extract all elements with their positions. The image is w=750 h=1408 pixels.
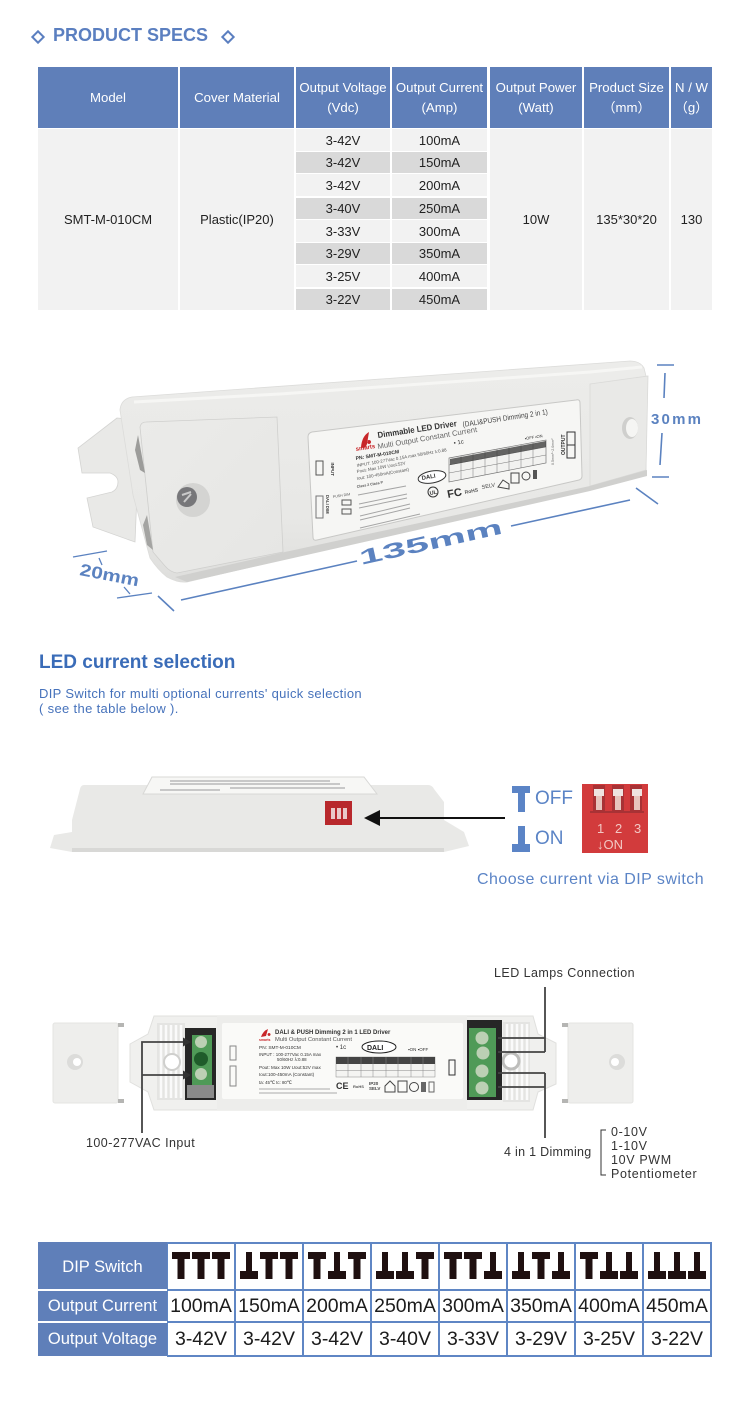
table body: SMT-M-010CM xyxy=(64,212,152,227)
current row: 450mA xyxy=(646,1294,708,1316)
screw xyxy=(176,483,210,517)
wiring diagram photo xyxy=(52,1016,634,1110)
row labels: DIP Switch xyxy=(62,1258,143,1276)
current row xyxy=(168,1291,710,1321)
caption: choose current: Choose current via DIP switch xyxy=(477,871,704,888)
current row: 400mA xyxy=(578,1294,640,1316)
table body: 3-40V xyxy=(326,201,360,216)
table body: 200mA xyxy=(419,178,460,192)
table header row: N / W xyxy=(675,80,708,94)
center label: Multi Output Constant Current xyxy=(275,1037,352,1043)
table header row: Model xyxy=(90,90,126,104)
table body: 100mA xyxy=(419,132,460,148)
table header row: (Amp) xyxy=(422,100,457,114)
side view of driver with DIP switch xyxy=(50,776,469,852)
DALI logo: DALI xyxy=(421,474,436,482)
specs table xyxy=(38,67,712,310)
driver body xyxy=(78,361,648,582)
table body: 130 xyxy=(681,212,702,227)
input terminal mark xyxy=(316,461,351,518)
label: LED lamps connection: LED Lamps Connection xyxy=(494,966,635,980)
table body: 300mA xyxy=(419,224,460,238)
center label: DALI & PUSH Dimming 2 in 1 LED Driver xyxy=(275,1030,391,1036)
table body: 135*30*20 xyxy=(596,212,657,227)
dimension: 30mm: 30mm xyxy=(651,411,701,428)
center label: smarts xyxy=(259,1038,271,1042)
heading: product specs: PRODUCT SPECS xyxy=(53,25,208,45)
red DIP switch close-up xyxy=(582,784,648,853)
voltage row: 3-29V xyxy=(515,1328,567,1350)
end cap right xyxy=(590,376,648,486)
dimming options list xyxy=(600,1125,697,1181)
row labels: Output Voltage xyxy=(48,1330,157,1348)
center label: SELV xyxy=(369,1086,380,1091)
table header row: Output Power xyxy=(496,80,576,94)
table header row: Output Current xyxy=(396,80,483,94)
section description: ( see the table below ). xyxy=(39,701,179,716)
dimension: 30mm xyxy=(651,365,701,477)
logo xyxy=(261,1029,271,1037)
callout: LED lamp lines xyxy=(498,987,545,1052)
product label: • 1c xyxy=(453,439,464,447)
product label: Dimmable LED Driver xyxy=(377,418,458,440)
center label: 50/60Hz λ:0.88 xyxy=(277,1057,307,1062)
table body: 250mA xyxy=(419,201,460,216)
voltage row xyxy=(168,1323,710,1355)
label: 4 in 1 dimming: 4 in 1 Dimming xyxy=(504,1145,592,1159)
left cover xyxy=(53,1023,124,1103)
dimming options list: 0-10V xyxy=(611,1125,648,1139)
table header row: Output Voltage xyxy=(299,80,387,94)
certification marks: UL xyxy=(429,490,438,497)
product label: INPUT: 100-277Vac 0.15A max 50/60Hz λ:0.88 xyxy=(356,447,448,468)
voltage row: 3-42V xyxy=(311,1328,363,1350)
center label: PN: SMT-M-010CM xyxy=(259,1045,301,1051)
center label: ta: 45℃ tc: 80℃ xyxy=(259,1080,292,1085)
table header row: (Vdc) xyxy=(327,100,359,114)
table body: Plastic(IP20) xyxy=(200,212,274,227)
red DIP switch close-up: 3 xyxy=(634,821,641,836)
table body: 3-29V xyxy=(326,246,360,261)
arrow to DIP switch xyxy=(364,810,505,826)
current row: 350mA xyxy=(510,1294,572,1316)
dimension: 135mm: 135mm xyxy=(357,516,505,570)
DIP switch legend xyxy=(512,786,573,852)
brand logo xyxy=(355,432,376,453)
voltage row: 3-40V xyxy=(379,1328,431,1350)
DIP switch table xyxy=(38,1242,712,1357)
center label xyxy=(217,1016,467,1110)
label: AC input: 100-277VAC Input xyxy=(86,1136,195,1150)
center label: INPUT : 100-277Vac 0.15A max xyxy=(259,1052,322,1057)
voltage row: 3-25V xyxy=(583,1328,635,1350)
certification marks: RoHS xyxy=(464,487,479,496)
center label: RoHS xyxy=(353,1084,364,1089)
table body: 3-22V xyxy=(326,292,360,307)
input terminal mark: DALI DIM xyxy=(325,495,330,514)
table body: 3-25V xyxy=(326,268,360,284)
right cover xyxy=(562,1023,633,1103)
red DIP switch close-up: 2 xyxy=(615,821,622,836)
table body: 10W xyxy=(523,212,549,227)
row labels xyxy=(38,1242,167,1357)
icon: off switch xyxy=(512,786,530,812)
table header row: Cover Material xyxy=(194,90,280,104)
left terminal block xyxy=(187,1035,214,1098)
end cap left xyxy=(140,417,283,573)
brand logo: smarts xyxy=(355,444,376,453)
section heading: LED current selection: LED current selection xyxy=(39,652,235,673)
switch icons row xyxy=(168,1244,710,1289)
product photo with dimensions xyxy=(72,360,701,612)
certification marks: SELV xyxy=(481,482,496,491)
dimming options list: 1-10V xyxy=(611,1139,648,1153)
mounting tab xyxy=(78,418,140,542)
dimension: 135mm xyxy=(158,488,658,611)
right terminal block xyxy=(469,1028,496,1097)
center label: Iout:100-450mA (Constant) xyxy=(259,1072,315,1077)
table body: 350mA xyxy=(419,246,460,261)
icon: on switch xyxy=(512,826,530,852)
product label: Pout: Max 10W Uout:52V xyxy=(356,460,406,474)
center label: CE xyxy=(336,1081,349,1091)
current row: 100mA xyxy=(170,1294,232,1316)
product label: Multi Output Constant Current xyxy=(377,425,479,451)
red DIP switch close-up: ↓ON xyxy=(597,837,623,852)
table body: 3-42V xyxy=(326,155,360,170)
mini DIP table xyxy=(449,433,546,482)
voltage row: 3-42V xyxy=(243,1328,295,1350)
voltage row: 3-42V xyxy=(175,1328,227,1350)
table body: 450mA xyxy=(419,292,460,307)
wiring callouts xyxy=(141,987,546,1138)
output terminal mark xyxy=(551,432,575,465)
product label: Iout: 100-450mA(Constant) xyxy=(356,467,410,481)
center label: • 1c xyxy=(336,1045,346,1051)
product label: (DALI&PUSH Dimming 2 in 1) xyxy=(462,407,549,429)
current row: 200mA xyxy=(306,1294,368,1316)
table header row: Product Size xyxy=(589,80,664,94)
table body: 3-33V xyxy=(326,224,360,238)
section description xyxy=(39,686,362,716)
current row: 250mA xyxy=(374,1294,436,1316)
input terminal mark: INPUT xyxy=(330,462,335,476)
table header row: （g） xyxy=(675,100,708,114)
product label xyxy=(308,400,582,540)
current row: 300mA xyxy=(442,1294,504,1316)
DIP switch legend: OFF xyxy=(535,788,573,809)
row labels: Output Current xyxy=(48,1296,157,1314)
center label: Pout: Max 10W Uout:52V max xyxy=(259,1065,321,1070)
output terminal mark: 0.5mm²~2.0mm² xyxy=(551,438,555,465)
output terminal mark: OUTPUT xyxy=(561,434,567,455)
product label: PN: SMT-M-010CM xyxy=(355,449,400,462)
table body: 400mA xyxy=(419,268,460,284)
current row: 150mA xyxy=(238,1294,300,1316)
DALI logo xyxy=(362,1041,396,1053)
dimension: 20mm xyxy=(73,551,152,598)
top label xyxy=(143,777,377,794)
voltage row: 3-33V xyxy=(447,1328,499,1350)
driver base xyxy=(130,1016,556,1110)
dimming options list: 10V PWM xyxy=(611,1153,672,1167)
certification marks: FC xyxy=(446,486,463,501)
callout: dimming lines xyxy=(498,1073,545,1138)
section description: DIP Switch for multi optional currents' quick selection xyxy=(39,686,362,701)
input terminal mark: PUSH DIM xyxy=(333,492,351,499)
table body: 150mA xyxy=(419,155,460,170)
table header row: （mm） xyxy=(602,100,651,114)
table body: 3-42V xyxy=(326,132,360,148)
DALI logo xyxy=(417,469,447,485)
red DIP switch close-up: 1 xyxy=(597,821,604,836)
DIP switch on driver xyxy=(325,801,352,825)
DIP switch legend: ON xyxy=(535,828,564,849)
table body xyxy=(38,129,712,310)
center label: ▪ON ▪OFF xyxy=(408,1047,428,1052)
table header row: (Watt) xyxy=(518,100,554,114)
dimension: 20mm: 20mm xyxy=(78,560,141,590)
callout: AC input lines xyxy=(142,1038,191,1133)
center label: DALI xyxy=(367,1045,383,1052)
table header row xyxy=(38,67,712,128)
product label: Class 2 Class P xyxy=(356,480,384,489)
table body: 3-42V xyxy=(326,178,360,192)
driver side body xyxy=(50,777,469,852)
certification marks xyxy=(428,470,537,501)
mini DIP table: ▪OFF ▪ON xyxy=(524,433,543,441)
mini DIP table xyxy=(336,1057,435,1077)
dimming options list: Potentiometer xyxy=(611,1167,697,1181)
voltage row: 3-22V xyxy=(651,1328,703,1350)
center label: IP20 xyxy=(369,1081,379,1086)
